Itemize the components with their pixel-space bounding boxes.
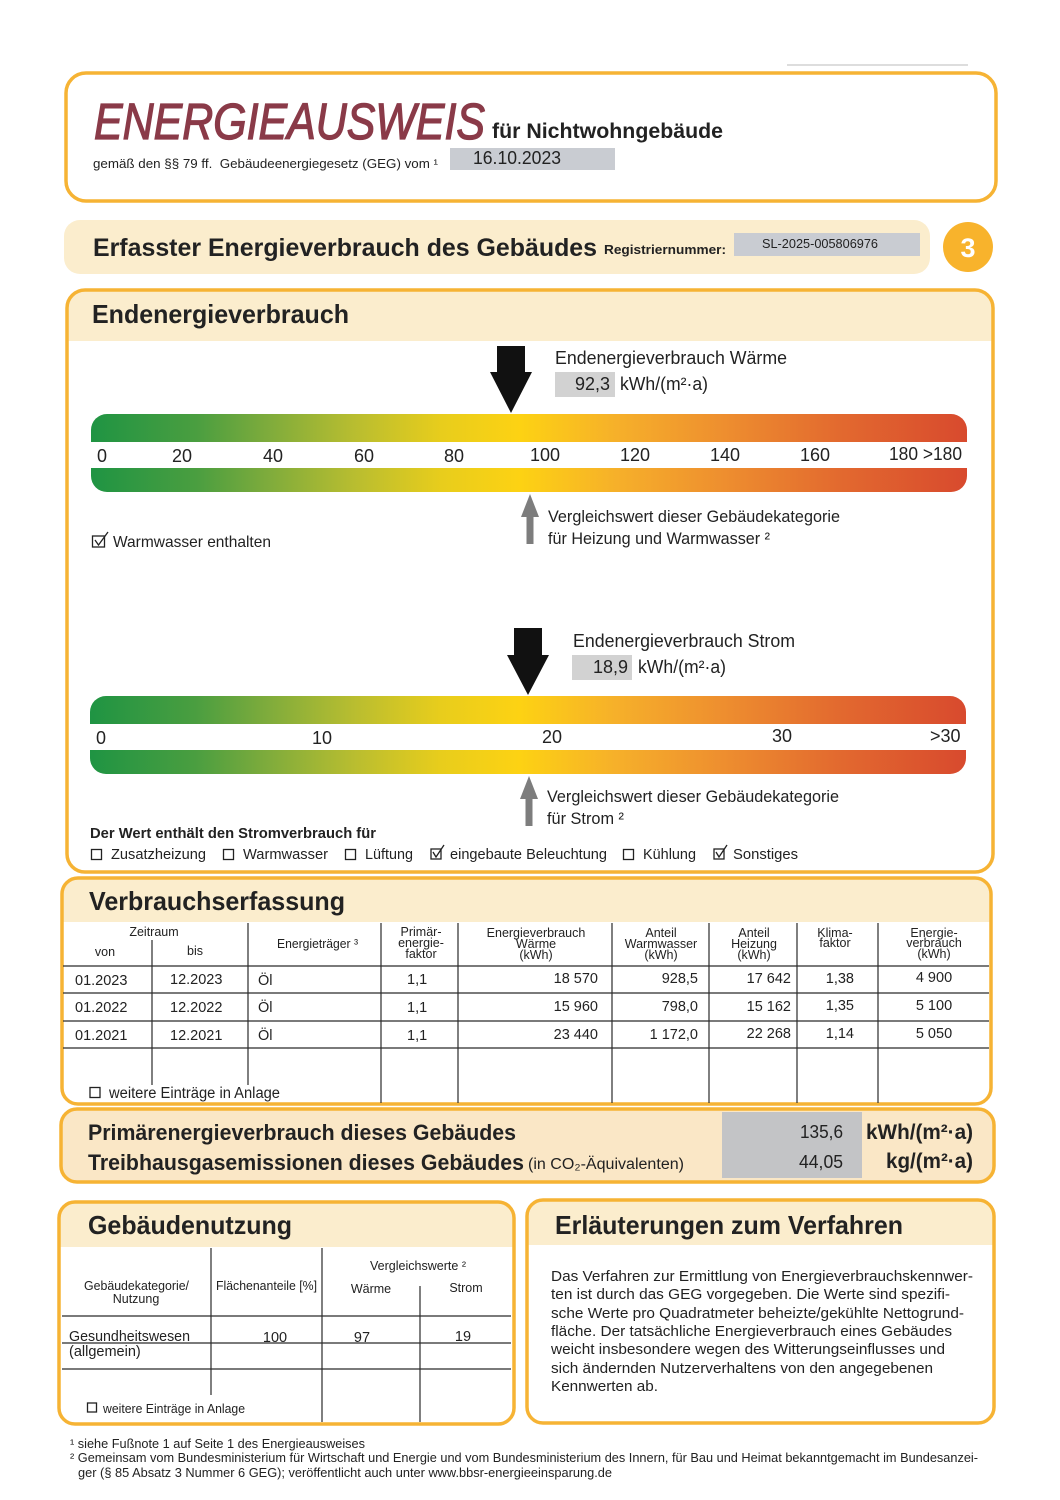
table: consumption records: verbrauch xyxy=(906,936,962,950)
explanation text: weicht insbesondere wegen des Witterungseinflusses und xyxy=(550,1342,945,1358)
heat comparison label: für Heizung und Warmwasser ² xyxy=(548,530,770,548)
row 2021: 23 440 xyxy=(554,1027,598,1043)
footnotes: ¹ siehe Fußnote 1 auf Seite 1 des Energieausweises xyxy=(70,1437,365,1451)
explanation text: sich ändernden Nutzerverhaltens von den angegebenen xyxy=(551,1361,933,1377)
explanation text: ten ist durch das GEG vorgegeben. Die Werte sind spezifi- xyxy=(551,1287,950,1303)
heat value label: 92,3 xyxy=(575,374,610,394)
electricity scale bar: 20 xyxy=(542,727,562,747)
heading: Gebäudenutzung xyxy=(88,1210,292,1240)
primary energy row: 135,6 xyxy=(800,1122,843,1142)
table: consumption records: Energie- xyxy=(910,926,958,940)
panel: method explanation xyxy=(527,1200,994,1423)
heat comparison label xyxy=(548,508,840,548)
electricity scope checkboxes xyxy=(92,845,798,863)
row 2023: 1,38 xyxy=(826,971,854,987)
heat scale bar: 0 xyxy=(97,446,107,466)
row 2021: 5 050 xyxy=(916,1026,952,1042)
table: consumption records: Anteil xyxy=(738,926,770,940)
electricity scale bar: 30 xyxy=(772,726,792,746)
row 2022: 01.2022 xyxy=(75,1000,127,1016)
heading strip: recorded energy consumption: Erfasster Energieverbrauch des Gebäudes xyxy=(93,234,597,262)
table: consumption records: (kWh) xyxy=(519,948,553,962)
table: consumption records: Primär- xyxy=(401,925,441,939)
grey value field xyxy=(722,1112,862,1178)
row 2023 xyxy=(75,970,952,989)
panel: title header xyxy=(66,73,996,201)
table: consumption records: (kWh) xyxy=(737,948,771,962)
row 2021: 1 172,0 xyxy=(650,1027,698,1043)
table: consumption records: (kWh) xyxy=(917,947,951,961)
table: building use: 97 xyxy=(354,1330,370,1346)
explanation text xyxy=(550,1269,973,1395)
row 2022: 5 100 xyxy=(916,998,952,1014)
arrow: heat value marker xyxy=(490,346,532,413)
table: building use: Flächenanteile [%] xyxy=(216,1279,317,1293)
row 2023: 4 900 xyxy=(916,970,952,986)
row 2022: 15 162 xyxy=(747,999,791,1015)
registration number xyxy=(734,233,920,256)
primary energy row xyxy=(88,1120,973,1145)
electricity scope checkboxes: Sonstiges xyxy=(733,846,798,863)
electricity scope checkboxes: eingebaute Beleuchtung xyxy=(450,846,607,863)
heading: Erläuterungen zum Verfahren xyxy=(555,1210,903,1240)
panel: final energy consumption xyxy=(67,290,993,872)
heat scale bar: 100 xyxy=(530,445,560,465)
page number badge: 3 xyxy=(960,233,976,263)
explanation text: Das Verfahren zur Ermittlung von Energieverbrauchskennwer- xyxy=(551,1269,973,1285)
primary energy row: Primärenergieverbrauch dieses Gebäudes xyxy=(88,1120,516,1145)
checkbox: further entries: weitere Einträge in Anlage xyxy=(108,1085,280,1102)
row 2021: 22 268 xyxy=(747,1026,791,1042)
panel: building use xyxy=(59,1202,514,1424)
primary energy row: kWh/(m²·a) xyxy=(866,1121,973,1144)
table: building use: Gesundheitswesen xyxy=(69,1329,190,1345)
row 2022: 15 960 xyxy=(554,999,598,1015)
emissions row: (in CO₂-Äquivalenten) xyxy=(528,1156,684,1173)
heading: Endenergieverbrauch xyxy=(92,299,349,329)
table: consumption records: Klima- xyxy=(817,926,853,940)
table: consumption records xyxy=(63,923,989,1103)
heading strip: recorded energy consumption xyxy=(64,220,930,274)
panel: consumption records xyxy=(62,878,991,1104)
table: consumption records: Warmwasser xyxy=(625,937,697,951)
footnotes: ² Gemeinsam vom Bundesministerium für Wirtschaft und Energie und vom Bundesministerium des Innern, für Bau und Heimat bekanntgemacht im Bundesanzei- xyxy=(70,1451,978,1465)
heat scale bar: 80 xyxy=(444,446,464,466)
heat scale bar: 180 >180 xyxy=(889,444,962,464)
heat scale bar: 40 xyxy=(263,446,283,466)
heat value label xyxy=(555,348,787,397)
electricity scope heading: Der Wert enthält den Stromverbrauch für xyxy=(90,825,376,842)
table: building use: Nutzung xyxy=(113,1292,159,1306)
table: building use: 100 xyxy=(263,1330,287,1346)
electricity scale bar: 0 xyxy=(96,728,106,748)
row 2023: 1,1 xyxy=(407,972,427,988)
heat scale bar: 120 xyxy=(620,445,650,465)
electricity value label: kWh/(m²·a) xyxy=(638,657,726,677)
table: consumption records: Wärme xyxy=(516,937,556,951)
row 2021: 12.2021 xyxy=(170,1028,222,1044)
row 2023: Öl xyxy=(258,971,272,989)
date field: 16.10.2023 xyxy=(473,148,561,168)
table: building use: Wärme xyxy=(351,1282,391,1296)
arrow: electricity comparison value xyxy=(520,776,538,826)
panel: primary energy and emissions xyxy=(61,1109,994,1182)
table: building use: 19 xyxy=(455,1329,471,1345)
electricity comparison label: Vergleichswert dieser Gebäudekategorie xyxy=(547,788,839,806)
row 2022: 12.2022 xyxy=(170,1000,222,1016)
table: consumption records: bis xyxy=(187,944,203,958)
row 2023: 01.2023 xyxy=(75,973,127,989)
explanation text: Kennwerten ab. xyxy=(551,1379,658,1395)
table: consumption records: Anteil xyxy=(645,926,677,940)
row 2021: Öl xyxy=(258,1026,272,1044)
table: consumption records: energie- xyxy=(398,936,444,950)
table: consumption records: Energieverbrauch xyxy=(487,926,585,940)
electricity value label xyxy=(572,631,795,680)
table: building use: Gebäudekategorie/ xyxy=(84,1279,190,1293)
row 2022 xyxy=(75,998,952,1016)
explanation text: sche Werte pro Quadratmeter beheizte/gekühlte Nettogrund- xyxy=(551,1306,964,1322)
electricity scope checkboxes: Zusatzheizung xyxy=(111,846,206,863)
heat scale bar: 140 xyxy=(710,445,740,465)
heat value label: kWh/(m²·a) xyxy=(620,374,708,394)
table: consumption records: Energieträger ³ xyxy=(277,937,358,951)
electricity scale bar xyxy=(90,696,966,774)
registration label: Registriernummer: xyxy=(604,242,726,257)
table: consumption records: von xyxy=(95,945,115,959)
registration number: SL-2025-005806976 xyxy=(762,237,878,251)
heat scale bar: 20 xyxy=(172,446,192,466)
table: building use: Vergleichswerte ² xyxy=(370,1259,466,1273)
electricity scale bar: 10 xyxy=(312,728,332,748)
legal basis: gemäß den §§ 79 ff. Gebäudeenergiegesetz (GEG) vom ¹ xyxy=(93,156,439,171)
electricity comparison label: für Strom ² xyxy=(547,810,624,828)
electricity scope checkboxes: Kühlung xyxy=(643,846,696,863)
heat value label: Endenergieverbrauch Wärme xyxy=(555,348,787,368)
table: consumption records: faktor xyxy=(819,936,851,950)
page number badge xyxy=(943,222,993,272)
row 2022: 1,35 xyxy=(826,998,854,1014)
title: ENERGIEAUSWEIS xyxy=(94,93,485,150)
electricity scope checkboxes: Lüftung xyxy=(365,846,413,863)
table: building use xyxy=(62,1248,511,1422)
emissions row xyxy=(88,1150,973,1175)
date field xyxy=(450,148,615,170)
arrow: heat comparison value xyxy=(521,494,539,544)
table: consumption records: Heizung xyxy=(731,937,777,951)
row 2023: 928,5 xyxy=(662,971,698,987)
emissions row: Treibhausgasemissionen dieses Gebäudes xyxy=(88,1150,524,1175)
checkbox: further entries: weitere Einträge in Anlage xyxy=(102,1401,245,1416)
row 2022: Öl xyxy=(258,998,272,1016)
footnotes xyxy=(70,1437,978,1480)
table: consumption records: Zeitraum xyxy=(129,925,179,939)
heat scale bar: 60 xyxy=(354,446,374,466)
table: consumption records: faktor xyxy=(405,947,437,961)
heading: Verbrauchserfassung xyxy=(89,886,345,916)
table: building use: Strom xyxy=(449,1281,483,1295)
row 2022: 1,1 xyxy=(407,1000,427,1016)
row 2023: 12.2023 xyxy=(170,972,222,988)
electricity value label: Endenergieverbrauch Strom xyxy=(573,631,795,651)
electricity scope checkboxes: Warmwasser xyxy=(243,846,328,863)
table: building use: (allgemein) xyxy=(69,1344,141,1360)
row 2022: 798,0 xyxy=(662,999,698,1015)
explanation text: fläche. Der tatsächliche Energieverbrauch eines Gebäudes xyxy=(551,1324,952,1340)
row 2021: 01.2021 xyxy=(75,1028,127,1044)
table: consumption records: (kWh) xyxy=(644,948,678,962)
row 2021: 1,14 xyxy=(826,1026,854,1042)
heat comparison label: Vergleichswert dieser Gebäudekategorie xyxy=(548,508,840,526)
emissions row: kg/(m²·a) xyxy=(886,1150,973,1173)
electricity scale bar: >30 xyxy=(930,726,961,746)
row 2021 xyxy=(75,1026,952,1044)
row 2023: 17 642 xyxy=(747,971,791,987)
electricity comparison label xyxy=(547,788,839,828)
heat scale bar: 160 xyxy=(800,445,830,465)
footnotes: ger (§ 85 Absatz 3 Nummer 6 GEG); veröffentlicht auch unter www.bbsr-energieeinsparung.de xyxy=(78,1466,612,1480)
checkbox: hot water included: Warmwasser enthalten xyxy=(113,534,271,551)
emissions row: 44,05 xyxy=(799,1152,843,1172)
subtitle: für Nichtwohngebäude xyxy=(492,120,723,143)
row 2023: 18 570 xyxy=(554,971,598,987)
row 2021: 1,1 xyxy=(407,1028,427,1044)
electricity value label: 18,9 xyxy=(593,657,628,677)
heat scale bar xyxy=(91,414,967,492)
arrow: electricity value marker xyxy=(507,628,549,695)
